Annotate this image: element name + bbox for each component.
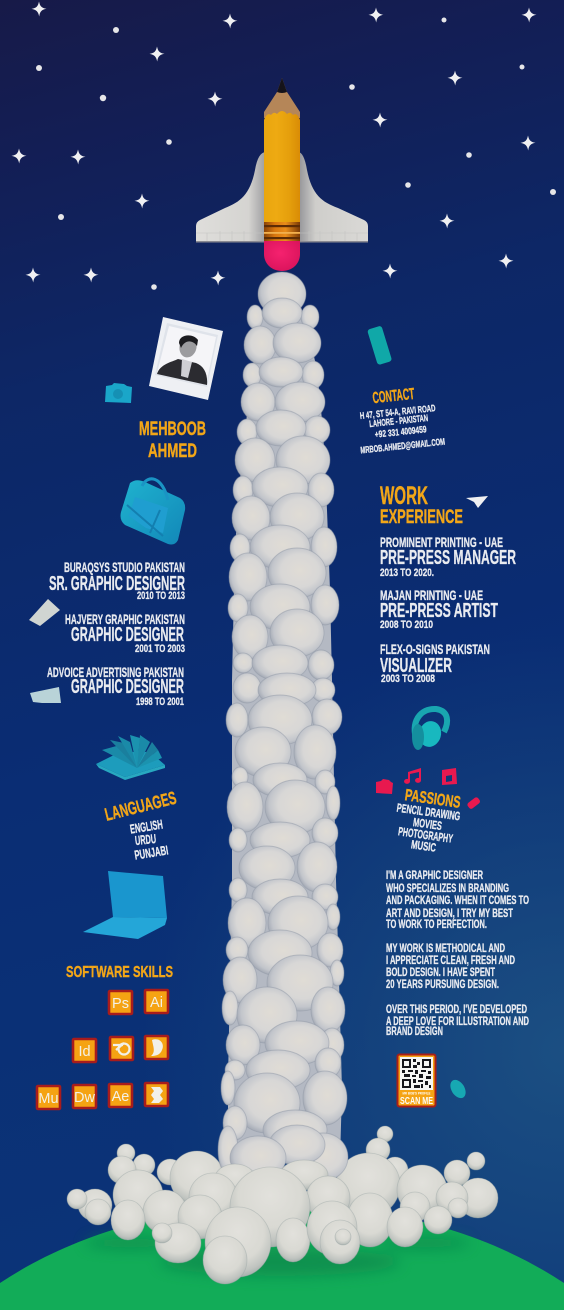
job: Buraqsys <box>49 560 185 602</box>
passions: MOVIES <box>412 815 443 833</box>
job: Buraqsys: BURAQSYS STUDIO PAKISTAN <box>64 560 185 575</box>
green planet <box>0 1205 564 1310</box>
name <box>139 419 206 462</box>
software icon labels <box>38 995 163 1107</box>
pencil body <box>264 111 300 223</box>
job: Majan <box>380 588 498 631</box>
exhaust cloud front pile <box>67 1160 468 1284</box>
passions: MUSIC <box>410 837 437 855</box>
software icon labels: Ae <box>112 1089 129 1105</box>
icon: headphones <box>412 709 447 750</box>
software icon labels: Ps <box>112 996 129 1012</box>
job: Prominent <box>380 535 516 579</box>
name: MEHBOOB <box>139 419 206 440</box>
software icon labels: Mu <box>38 1091 59 1107</box>
about text: 20 YEARS PURSUING DESIGN. <box>386 977 499 991</box>
job: Flex-o-signs: VISUALIZER <box>380 655 452 677</box>
job: Hajvery: GRAPHIC DESIGNER <box>71 624 184 646</box>
job: Hajvery: HAJVERY GRAPHIC PAKISTAN <box>65 612 185 627</box>
contact <box>359 386 446 456</box>
work experience heading <box>380 482 463 528</box>
passion icons <box>376 768 481 810</box>
right work history <box>380 535 516 685</box>
software icons <box>37 990 168 1109</box>
photo polaroid <box>149 317 223 400</box>
icon: camera <box>105 383 132 403</box>
portrait <box>157 335 207 385</box>
job: Flex-o-signs <box>380 642 490 685</box>
job: Advoice: 1998 TO 2001 <box>136 696 184 708</box>
icon: paper scrap 1 <box>29 599 60 626</box>
software icon labels: Dw <box>74 1090 95 1106</box>
contact: MRBOB.AHMED@GMAIL.COM <box>360 437 446 456</box>
contact: CONTACT <box>372 386 415 407</box>
exhaust cloud back pile <box>78 1126 498 1221</box>
left work history <box>47 560 185 708</box>
job: Advoice: ADVOICE ADVERTISING PAKISTAN <box>47 665 184 680</box>
icon: bag <box>120 479 185 544</box>
job: Buraqsys: SR. GRAPHIC DESIGNER <box>49 573 185 595</box>
pencil eraser <box>264 241 300 271</box>
about text <box>386 868 529 1038</box>
icon: teal pill <box>447 1077 469 1101</box>
icon: 3d logo <box>151 1087 163 1103</box>
about text: I'M A GRAPHIC DESIGNER <box>386 868 483 882</box>
job: Hajvery <box>65 612 185 655</box>
software icon labels: Id <box>78 1044 91 1060</box>
icon: paper plane <box>466 496 488 508</box>
job: Majan: 2008 TO 2010 <box>380 619 433 631</box>
stars <box>12 2 556 290</box>
job: Prominent: 2013 TO 2020. <box>380 567 434 579</box>
name: AHMED <box>148 441 197 462</box>
icon: paper scrap 2 <box>30 687 61 703</box>
job: Buraqsys: 2010 TO 2013 <box>137 590 185 602</box>
languages: PUNJABI <box>133 842 169 863</box>
contact: H 47, ST 54-A, RAVI ROAD <box>359 403 436 422</box>
languages: ENGLISH <box>129 817 164 837</box>
work experience heading: EXPERIENCE <box>380 507 463 528</box>
icon: camera red <box>376 779 393 794</box>
languages: URDU <box>134 831 157 848</box>
about text: TO WORK TO PERFECTION. <box>386 917 487 931</box>
contact: +92 331 4009459 <box>374 424 427 441</box>
icon: open book <box>96 735 165 780</box>
qr code scan me: MR BOB'S PROFILE <box>402 1090 431 1096</box>
about text: BOLD DESIGN. I HAVE SPENT <box>386 965 495 979</box>
languages <box>103 788 178 863</box>
qr code scan me: SCAN ME <box>400 1096 433 1107</box>
pencil tip <box>264 78 300 118</box>
job: Advoice: GRAPHIC DESIGNER <box>71 676 184 698</box>
languages: LANGUAGES <box>103 788 178 825</box>
icon: blender logo <box>113 1043 130 1054</box>
passions: PENCIL DRAWING <box>396 801 461 823</box>
icon: laptop <box>83 871 167 939</box>
rocket pencil <box>196 78 368 271</box>
qr code scan me <box>398 1054 436 1107</box>
pencil ferrule <box>264 222 300 242</box>
icon: music note <box>404 768 421 784</box>
job: Flex-o-signs: FLEX-O-SIGNS PAKISTAN <box>380 642 490 657</box>
job: Flex-o-signs: 2003 TO 2008 <box>381 673 435 685</box>
software skills title: SOFTWARE SKILLS <box>66 964 173 981</box>
icon: phone <box>367 325 392 365</box>
job: Majan: MAJAN PRINTING - UAE <box>380 588 483 603</box>
rocket wings <box>196 152 368 242</box>
job: Hajvery: 2001 TO 2003 <box>135 643 185 655</box>
cloud shadow on planet <box>85 1237 470 1276</box>
icon: film box <box>442 768 457 785</box>
software icon labels: Ai <box>150 995 163 1011</box>
passions <box>396 786 462 855</box>
passions: PHOTOGRAPHY <box>397 824 454 846</box>
icon: eraser <box>466 796 481 810</box>
passions: PASSIONS <box>404 786 462 812</box>
about text: BRAND DESIGN <box>386 1024 443 1038</box>
job: Advoice <box>47 665 184 708</box>
icon: swirl logo <box>151 1039 163 1056</box>
contact: LAHORE - PAKISTAN <box>369 413 429 430</box>
work experience heading: WORK <box>380 482 428 510</box>
smoke column <box>218 272 348 1181</box>
